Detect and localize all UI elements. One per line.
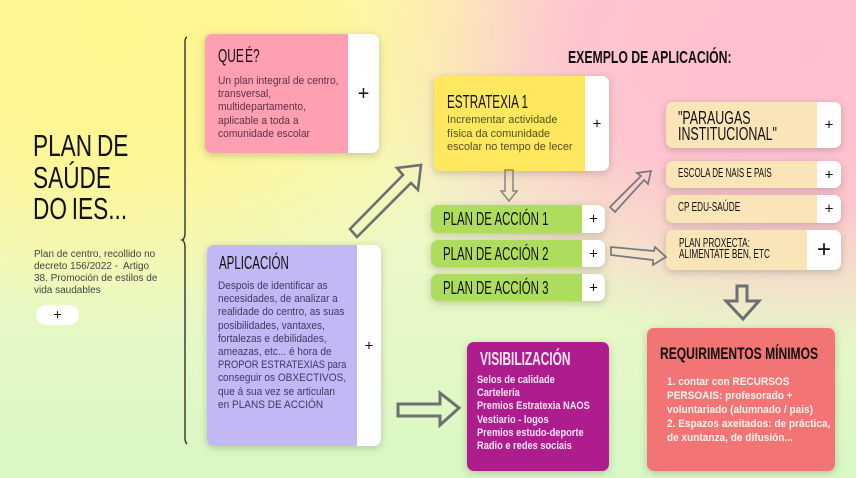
- panel: plan de acción 3: PLAN DE ACCIÓN 3: [443, 278, 548, 298]
- text: aplicación: conseguir os OBXECTIVOS,: [218, 372, 346, 384]
- panel: aplicación: [207, 245, 381, 446]
- plus tab: +: [358, 82, 369, 104]
- text: que é: transversal,: [218, 88, 271, 100]
- plus tab: +: [365, 337, 373, 354]
- panel: requirimentos mínimos: 2. Espazos axeitados: de práctica,: [667, 418, 830, 430]
- panel: plan de acción 3: +: [589, 279, 598, 296]
- panel: visibilización: Vestiario - logos: [477, 414, 549, 426]
- plus tab: [357, 245, 381, 446]
- panel: paraugas institucional: INSTITUCIONAL": [678, 124, 777, 144]
- plus tab: [348, 34, 379, 153]
- panel: escola de nais e pais: +: [825, 166, 833, 183]
- text: aplicación: [218, 280, 346, 411]
- panel: visibilización: Cartelería: [477, 387, 520, 399]
- panel: plan de acción 1: [431, 205, 605, 233]
- text: aplicación: Despois de identificar as: [218, 280, 328, 292]
- panel: visibilización: VISIBILIZACIÓN: [480, 349, 570, 369]
- text: que é: multidepartamento,: [218, 101, 306, 113]
- panel: paraugas institucional: +: [825, 116, 833, 134]
- panel: visibilización: Selos de calidade: [477, 374, 555, 386]
- heading: aplicación: APLICACIÓN: [219, 253, 289, 273]
- text: aplicación: fortalezas e debilidades,: [218, 333, 327, 345]
- panel: plan de acción 3: [431, 274, 605, 301]
- panel: plan de acción 1: PLAN DE ACCIÓN 1: [443, 209, 548, 229]
- panel: cp edu-saúde: CP EDU-SAÚDE: [678, 200, 740, 214]
- title: PLAN DE: [33, 128, 128, 163]
- panel: plan de acción 2: +: [589, 245, 598, 262]
- arrow: plan 2 to plan proxecta: [611, 247, 666, 265]
- panel: paraugas institucional: "PARAUGAS: [678, 108, 751, 128]
- text: aplicación: realidade do centro, as suas: [218, 306, 344, 318]
- text: estratexia: [447, 114, 573, 153]
- panel: estratexia 1: [434, 76, 609, 171]
- panel: plan proxecta: [666, 230, 841, 270]
- title: [33, 128, 128, 226]
- panel: visibilización: Premios estudo-deporte: [477, 427, 584, 439]
- panel: que é: [205, 34, 379, 153]
- panel: plan proxecta: PLAN PROXECTA:: [679, 236, 750, 250]
- panel: paraugas institucional: [666, 102, 841, 148]
- arrow: down to requirimentos: [726, 286, 759, 319]
- text: aplicación: necesidades, de analizar a: [218, 293, 338, 305]
- text: aplicación: en PLANS DE ACCIÓN: [218, 399, 323, 411]
- panel: escola de nais e pais: [666, 161, 841, 188]
- text: estratexia: Incrementar actividade: [447, 114, 557, 126]
- brace: [180, 36, 188, 444]
- subtitle description: Plan de centro, recollido no: [34, 249, 155, 260]
- title: SAÚDE: [33, 160, 111, 194]
- plus button: [36, 305, 79, 325]
- heading: exemplo: EXEMPLO DE APLICACIÓN:: [568, 47, 732, 67]
- subtitle description: vida saudables: [34, 285, 101, 296]
- panel: escola de nais e pais: ESCOLA DE NAIS E PAIS: [678, 166, 772, 180]
- plus tab: +: [593, 115, 601, 132]
- plus button: +: [53, 306, 62, 322]
- panel: plan proxecta: +: [817, 236, 831, 263]
- text: que é: [218, 75, 339, 140]
- plus tab: [585, 76, 609, 171]
- text: aplicación: que á sua vez se articulan: [218, 386, 335, 398]
- panel: requirimentos mínimos: de xuntanza, de difusión...: [667, 432, 793, 444]
- panel: cp edu-saúde: +: [825, 200, 833, 218]
- title: DO IES...: [33, 191, 127, 226]
- text: estratexia: escolar no tempo de lecer: [447, 141, 573, 153]
- arrow: plan 1 to paraugas: [610, 171, 651, 212]
- arrow: estratexia to plan 1: [501, 170, 517, 201]
- panel: cp edu-saúde: [666, 195, 841, 223]
- subtitle description: decreto 156/2022 - Artigo: [34, 261, 149, 272]
- subtitle description: [34, 249, 157, 296]
- text: aplicación: ameazas, etc... é hora de: [218, 346, 332, 358]
- text: que é: aplicable a toda a: [218, 115, 299, 127]
- arrow: que é to estratexia: [350, 165, 421, 237]
- panel: requirimentos mínimos: PERSOAIS: profesorado +: [667, 390, 793, 402]
- text: que é: Un plan integral de centro,: [218, 75, 339, 87]
- text: estratexia: física da comunidade: [447, 128, 550, 140]
- text: que é: comunidade escolar: [218, 128, 310, 140]
- arrow: aplicación to visibilización: [398, 393, 459, 425]
- text: aplicación: posibilidades, vantaxes,: [218, 320, 325, 332]
- text: aplicación: PROPOR ESTRATEXIAS para: [218, 359, 346, 371]
- panel: requirimentos mínimos: [647, 328, 835, 471]
- heading: estratexia: ESTRATEXIA 1: [447, 92, 528, 112]
- panel: plan de acción 2: [431, 240, 605, 267]
- subtitle description: 38. Promoción de estilos de: [34, 273, 157, 284]
- panel: visibilización: Premios Estratexia NAOS: [477, 400, 590, 412]
- panel: requirimentos mínimos: 1. contar con RECURSOS: [667, 376, 789, 388]
- panel: visibilización: Radio e redes sociais: [477, 440, 572, 452]
- panel: visibilización: [467, 342, 609, 471]
- heading: que é: QUE É?: [218, 46, 260, 66]
- panel: plan proxecta: ALIMENTATE BEN, ETC: [679, 246, 770, 260]
- panel: requirimentos mínimos: voluntariado (alumnado / pais): [667, 404, 813, 416]
- panel: plan de acción 2: PLAN DE ACCIÓN 2: [443, 244, 548, 264]
- panel: plan de acción 1: +: [589, 210, 598, 228]
- panel: requirimentos mínimos: REQUIRIMENTOS MÍNIMOS: [660, 344, 818, 363]
